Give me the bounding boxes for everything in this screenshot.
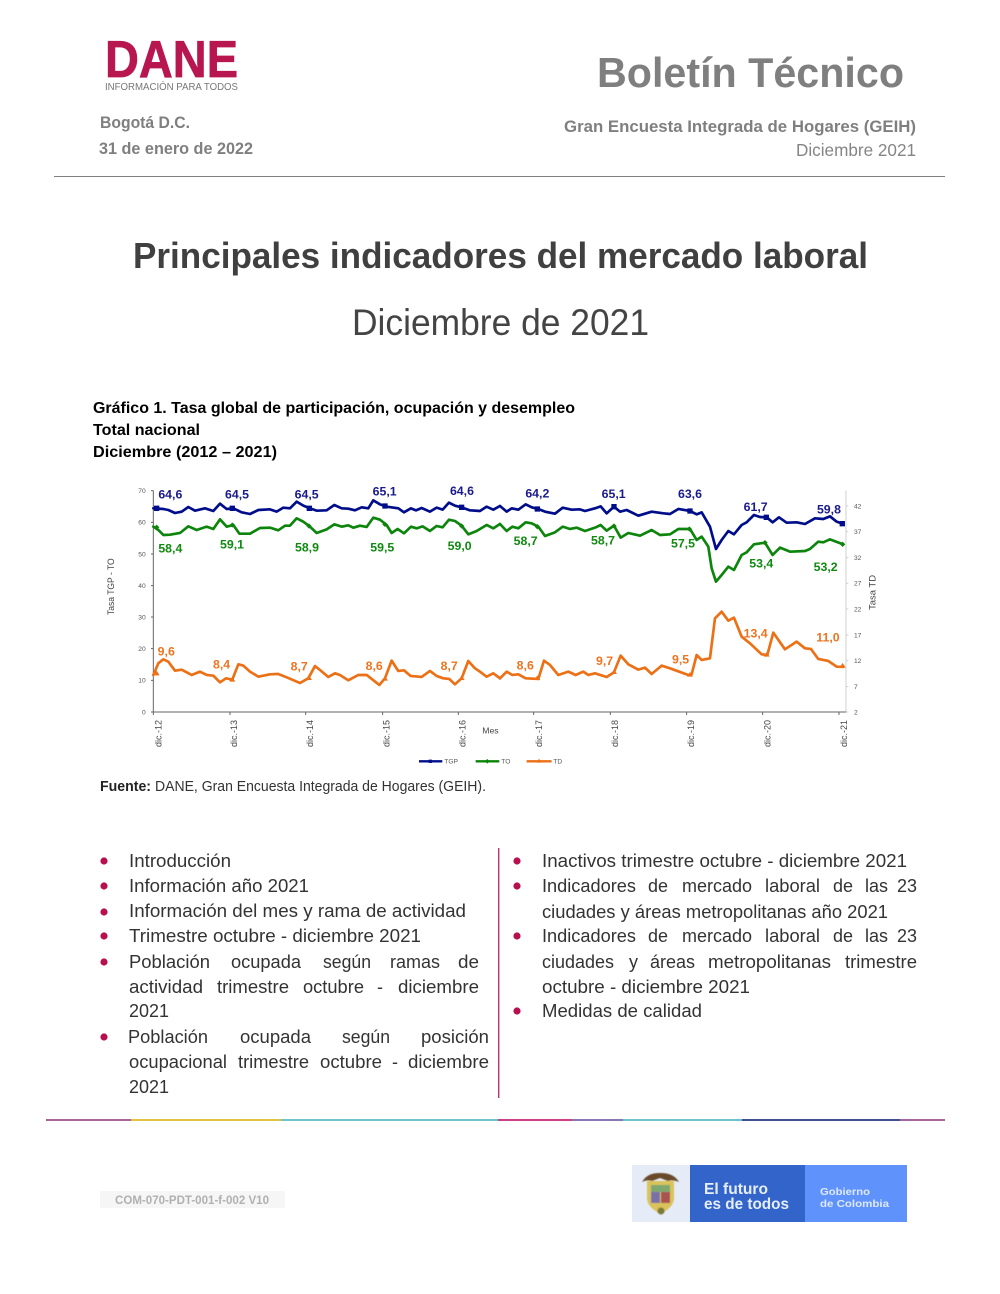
contents list: left column: ramas [390, 951, 440, 972]
government logo banner: Gobierno [820, 1186, 870, 1198]
contents list: left column [100, 850, 489, 1097]
data labels: TD: 11,0 [816, 631, 840, 645]
government logo banner: de Colombia [820, 1198, 889, 1210]
chart legend [419, 759, 562, 766]
contents list: right column: 23 [897, 925, 917, 946]
x axis: dic.-18 [610, 720, 620, 747]
data labels: TGP: 59,8 [817, 502, 841, 516]
data labels: TD: 8,7 [291, 660, 308, 674]
location and date [99, 114, 253, 158]
chart legend: TGP [444, 759, 459, 766]
contents list: left column: - [377, 976, 383, 997]
data labels: TD: 9,5 [672, 652, 689, 666]
contents list: left column: ocupacional [129, 1051, 227, 1072]
contents list: right column: de [648, 925, 668, 946]
contents list: right column: las [865, 875, 888, 896]
data labels: TD: 8,6 [517, 658, 534, 672]
data labels: TGP: 64,6 [158, 487, 182, 501]
right axis: 27 [854, 581, 862, 588]
data labels: TGP: 65,1 [602, 487, 626, 501]
contents list: right column: octubre - diciembre 2021 [542, 976, 750, 997]
left axis: Tasa TGP - TO [106, 558, 116, 615]
chart legend: TO [501, 759, 510, 766]
left axis: 40 [138, 583, 146, 590]
left axis: 10 [138, 678, 146, 685]
contents list: left column: trimestre [217, 976, 289, 997]
data labels: TO: 57,5 [671, 537, 695, 551]
chart heading: Total nacional [93, 422, 200, 439]
left axis: 60 [138, 520, 146, 527]
contents list: right column: trimestre [845, 951, 917, 972]
contents list: right column [513, 850, 917, 1021]
contents list: right column: mercado [682, 875, 752, 896]
data labels: TGP: 64,5 [225, 487, 249, 501]
location and date: 31 de enero de 2022 [99, 140, 253, 158]
contents list: right column: Indicadores [542, 875, 636, 896]
data labels: TO: 59,5 [370, 541, 394, 555]
data labels: TD: 9,7 [596, 654, 613, 668]
logo: DANE: INFORMACIÓN PARA TODOS [105, 80, 238, 93]
contents list: left column: 2021 [129, 1076, 169, 1097]
contents list: left column: ocupada [231, 951, 302, 972]
bullets [513, 857, 521, 1015]
data labels: TGP: 63,6 [678, 487, 702, 501]
x axis: dic.-21 [839, 720, 849, 747]
left axis: 30 [138, 614, 146, 621]
contents list: right column: laboral [765, 925, 820, 946]
chart heading [93, 400, 575, 461]
contents list: left column: trimestre [238, 1051, 309, 1072]
data labels: TO: 58,9 [295, 541, 319, 555]
contents list: right column: ciudades y áreas metropolitanas año 2021 [542, 901, 888, 922]
data labels: TO: 53,2 [814, 560, 838, 574]
main title: Principales indicadores del mercado laboral [133, 235, 868, 276]
contents list: right column: Medidas de calidad [542, 1000, 702, 1021]
x axis: dic.-15 [382, 720, 392, 747]
data labels: TD: 8,6 [366, 659, 383, 673]
right axis: 12 [854, 658, 862, 665]
data labels: TO: 58,4 [158, 541, 182, 555]
contents list: left column: Trimestre octubre - diciembre 2021 [129, 925, 421, 946]
right axis [846, 491, 878, 716]
contents list: right column: de [648, 875, 668, 896]
contents list: right column: de [833, 875, 853, 896]
header: bulletin title: Gran Encuesta Integrada de Hogares (GEIH) [564, 117, 916, 136]
contents list: left column: Población [129, 951, 210, 972]
bullets [100, 857, 108, 1041]
x axis: dic.-17 [534, 720, 544, 747]
data labels: TGP: 64,2 [525, 486, 549, 500]
contents list: left column: según [323, 951, 371, 972]
left axis [106, 488, 153, 716]
icon: coat of arms [642, 1173, 679, 1214]
data labels: TO: 53,4 [749, 556, 773, 570]
contents list: right column: áreas [650, 951, 695, 972]
chart legend: TD [553, 759, 562, 766]
x axis: dic.-20 [763, 720, 773, 747]
contents list: right column: metropolitanas [708, 951, 831, 972]
contents list: right column: y [629, 951, 639, 972]
contents list: right column: Indicadores [542, 925, 636, 946]
contents list: right column: mercado [682, 925, 752, 946]
x axis: dic.-19 [686, 720, 696, 747]
data labels: TO: 59,0 [448, 539, 472, 553]
right axis: 32 [854, 555, 862, 562]
data labels: TD: 13,4 [744, 627, 768, 641]
chart heading: Gráfico 1. Tasa global de participación, ocupación y desempleo [93, 400, 575, 417]
right axis: 22 [854, 606, 862, 613]
right axis: 17 [854, 632, 862, 639]
x axis: dic.-16 [457, 720, 467, 747]
header: bulletin title: Boletín Técnico [597, 49, 904, 96]
data labels: TD [158, 627, 840, 674]
source note: DANE, Gran Encuesta Integrada de Hogares (GEIH). [155, 779, 486, 795]
right axis: 7 [854, 684, 858, 691]
contents list: left column: actividad [129, 976, 203, 997]
contents list: right column: 23 [897, 875, 917, 896]
government logo banner: El futuro [704, 1181, 768, 1198]
header: bulletin title: Diciembre 2021 [796, 140, 916, 160]
x axis: dic.-12 [153, 720, 163, 747]
data labels: TD: 8,4 [213, 657, 230, 671]
contents list: right column: ciudades [542, 951, 614, 972]
contents list: left column: diciembre [398, 976, 479, 997]
contents list: left column: - [392, 1051, 398, 1072]
contents list: left column: ocupada [240, 1026, 312, 1047]
data labels: TO [158, 533, 838, 574]
contents list: left column: Introducción [129, 850, 231, 871]
contents list: right column: de [833, 925, 853, 946]
contents list: left column: octubre [320, 1051, 382, 1072]
right axis: 2 [854, 709, 858, 716]
data labels: TD: 9,6 [158, 645, 175, 659]
contents list: right column: Inactivos trimestre octubre - diciembre 2021 [542, 850, 907, 871]
right axis: 37 [854, 529, 862, 536]
location and date: Bogotá D.C. [100, 114, 190, 132]
contents list: left column: según [342, 1026, 390, 1047]
contents list: left column: de [458, 951, 479, 972]
data labels: TO: 58,7 [514, 534, 538, 548]
source note: Fuente: [100, 779, 151, 795]
document code: COM-070-PDT-001-f-002 V10 [115, 1193, 269, 1207]
contents list: left column: 2021 [129, 1000, 169, 1021]
contents list: right column: laboral [765, 875, 820, 896]
left axis: 0 [142, 709, 146, 716]
subtitle: Diciembre de 2021 [352, 302, 649, 343]
contents list: right column: las [865, 925, 888, 946]
contents list: left column: diciembre [408, 1051, 489, 1072]
left axis: 70 [138, 488, 146, 495]
right axis: Tasa TD [868, 575, 878, 610]
line chart: TGP, TO, TD [106, 484, 878, 766]
header: bulletin title [564, 49, 916, 160]
left axis: 20 [138, 646, 146, 653]
government logo banner [632, 1165, 907, 1222]
x axis: dic.-13 [229, 720, 239, 747]
contents list: left column: posición [421, 1026, 489, 1047]
footer colour stripe [46, 1119, 945, 1121]
right axis: 42 [854, 503, 862, 510]
data labels: TGP: 61,7 [744, 500, 768, 514]
contents list: left column: Información año 2021 [129, 875, 309, 896]
x axis: Mes [482, 725, 499, 735]
contents list: left column: octubre [303, 976, 364, 997]
data labels: TGP: 64,5 [295, 487, 319, 501]
government logo banner: es de todos [704, 1196, 789, 1213]
data labels: TGP: 65,1 [373, 485, 397, 499]
contents list: left column: Información del mes y rama de actividad [129, 900, 466, 921]
data labels: TD: 8,7 [441, 659, 458, 673]
series: TO [153, 518, 845, 582]
x axis: dic.-14 [305, 720, 315, 747]
x axis [153, 712, 849, 747]
contents list: left column: Población [128, 1026, 208, 1047]
logo: DANE: DANE [105, 31, 238, 89]
series: TD [153, 612, 846, 685]
data labels: TGP [158, 484, 841, 516]
data labels: TO: 59,1 [220, 537, 244, 551]
series: TGP [153, 500, 845, 549]
left axis: 50 [138, 551, 146, 558]
data labels: TO: 58,7 [591, 533, 615, 547]
chart heading: Diciembre (2012 – 2021) [93, 444, 277, 461]
data labels: TGP: 64,6 [450, 484, 474, 498]
